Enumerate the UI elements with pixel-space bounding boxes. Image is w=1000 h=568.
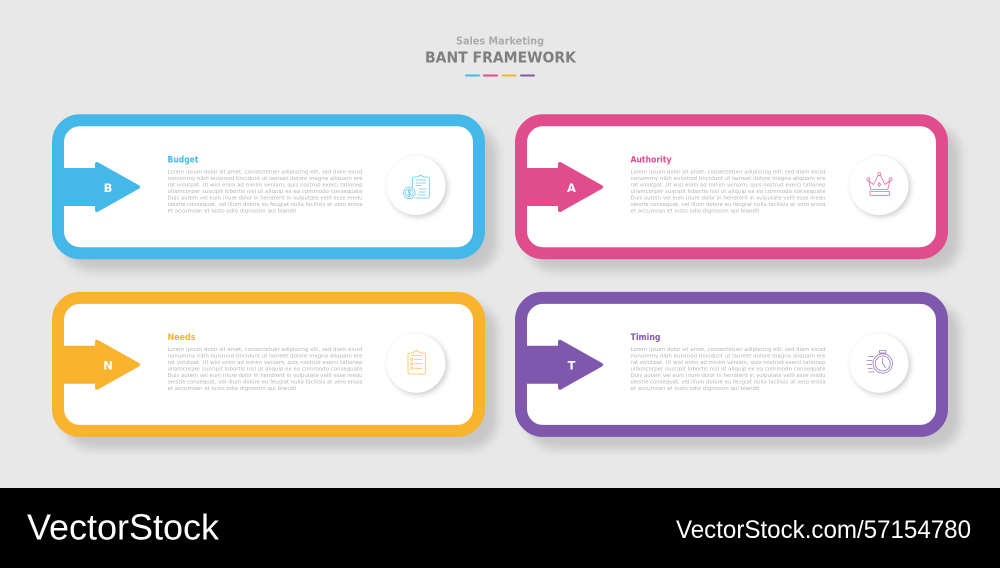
arrow with letter N [60,342,138,388]
body text [630,169,826,214]
body text [630,347,826,392]
body text: rat volutpat. Ut wisi enim ad minim veniam, quis nostrud exerci tationep [630,360,826,366]
arrow with letter A: A [567,181,576,195]
panel: timing [521,298,960,449]
icon: clipboard with dollar coin [404,175,429,198]
icon: crown [867,172,892,195]
watermark logo: VectorStock [27,506,220,548]
body text: nonummy nibh euismod tincidunt ut laoreet dolore magna aliquam ere [168,354,362,360]
body text: rat volutpat. Ut wisi enim ad minim veniam, quis nostrud exerci tationep [168,182,363,188]
body text: ullamcorper suscipit lobortis nisl ut aliquip ex ea commodo consequate [168,189,362,195]
footer bar [0,488,1000,568]
body text: Duis autem vel eum iriure dolor in hendrerit in vulputate velit esse medu [630,196,826,202]
body text: Lorem ipsum dolor sit amet, consectetuer adipiscing elit, sed diam eiusd [168,169,362,175]
body text: et accumsan et iusto odio dignissim qui blandit [630,208,760,214]
card frame [58,298,479,431]
body text: et accumsan et iusto odio dignissim qui blandit [630,386,760,392]
body text [168,169,363,214]
arrow with letter A [523,164,601,210]
subtitle: Sales Marketing [456,36,544,48]
body text: Lorem ipsum dolor sit amet, consectetuer adipiscing elit, sed diam eiusd [630,169,826,175]
card frame [521,120,942,253]
body text: Lorem ipsum dolor sit amet, consectetuer adipiscing elit, sed diam eiusd [168,347,362,353]
card frame [58,120,479,253]
watermark url: VectorStock.com/57154780 [676,516,971,544]
body text: Duis autem vel eum iriure dolor in hendrerit in vulputate velit esse medu [168,373,362,379]
panel: budget [58,120,497,271]
heading: timing: Timing [630,333,660,343]
body text: et accumsan et iusto odio dignissim qui blandit [168,386,296,392]
icon circle [386,156,448,217]
body text: nonummy nibh euismod tincidunt ut laoreet dolore magna aliquam ere [630,176,826,182]
arrow with letter T [523,342,601,388]
colour dashes [465,74,535,76]
body text: Duis autem vel eum iriure dolor in hendrerit in vulputate velit esse medu [168,196,362,202]
panel: needs [58,298,497,449]
body text: olestie consequat, vel illum dolore eu feugiat nulla facilisis at vero erosa [168,202,362,208]
arrow with letter B: B [104,181,112,195]
card frame [521,298,942,431]
body text: rat volutpat. Ut wisi enim ad minim veniam, quis nostrud exerci tationep [168,360,363,366]
header [425,36,577,76]
icon: checklist clipboard [408,350,426,374]
body text: nonummy nibh euismod tincidunt ut laoreet dolore magna aliquam ere [630,354,826,360]
body text [168,347,363,392]
body text: Lorem ipsum dolor sit amet, consectetuer adipiscing elit, sed diam eiusd [630,347,826,353]
arrow with letter N: N [103,359,113,373]
body text: olestie consequat, vel illum dolore eu feugiat nulla facilisis at vero erosa [630,202,826,208]
body text: ullamcorper suscipit lobortis nisl ut aliquip ex ea commodo consequate [168,367,362,373]
icon circle [850,334,910,395]
body text: ullamcorper suscipit lobortis nisl ut aliquip ex ea commodo consequate [630,367,826,373]
icon: stopwatch [867,350,892,373]
icon circle [386,334,448,395]
body text: rat volutpat. Ut wisi enim ad minim veniam, quis nostrud exerci tationep [630,182,826,188]
arrow with letter T: T [568,359,576,373]
heading: budget: Budget [168,156,198,166]
body text: et accumsan et iusto odio dignissim qui blandit [168,208,296,214]
title: BANT FRAMEWORK [425,48,577,66]
heading: authority: Authority [630,156,672,166]
body text: olestie consequat, vel illum dolore eu feugiat nulla facilisis at vero erosa [630,380,826,386]
icon circle [850,156,910,217]
arrow with letter B [60,164,138,210]
body text: olestie consequat, vel illum dolore eu feugiat nulla facilisis at vero erosa [168,380,362,386]
body text: nonummy nibh euismod tincidunt ut laoreet dolore magna aliquam ere [168,176,362,182]
panel: authority [521,120,960,271]
heading: needs: Needs [168,333,196,343]
body text: ullamcorper suscipit lobortis nisl ut aliquip ex ea commodo consequate [630,189,826,195]
body text: Duis autem vel eum iriure dolor in hendrerit in vulputate velit esse medu [630,373,826,379]
